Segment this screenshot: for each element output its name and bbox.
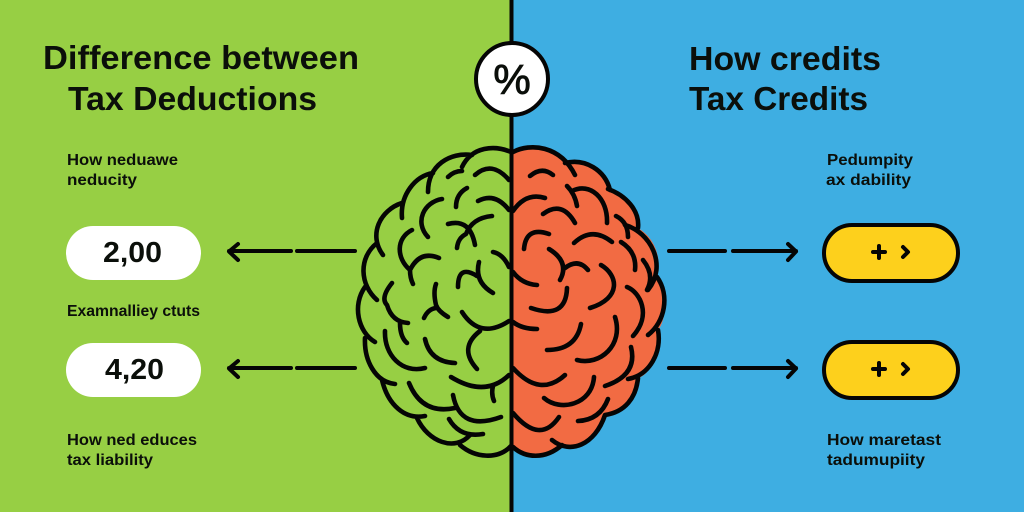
brain right half fill <box>511 147 665 456</box>
text: pedumpity: ax dability <box>826 172 911 189</box>
heading: tax credits <box>689 40 881 117</box>
text: how maretast: tadumupiity <box>827 452 925 469</box>
panel: tax credits background <box>511 0 1024 512</box>
text: how ned educes: How ned educes <box>67 432 197 449</box>
value pill: 4,20: 4,20 <box>105 354 164 386</box>
text: pedumpity: Pedumpity <box>827 152 913 169</box>
yellow pill: lower <box>824 342 958 398</box>
text: pedumpity <box>826 152 913 189</box>
arrow: brain to 4,20 <box>229 361 355 377</box>
icon: percent badge <box>476 43 548 115</box>
value pill: 4,20 <box>66 343 201 397</box>
arrow: brain to 2,00 <box>229 244 355 260</box>
heading: tax deductions <box>43 39 359 117</box>
text: examnalliey ctuts: Examnalliey ctuts <box>67 303 200 320</box>
text: how neduawe: neducity <box>67 172 137 189</box>
heading: tax credits: How credits <box>689 40 881 77</box>
brain left folds <box>384 169 509 435</box>
brain left outline <box>358 148 511 456</box>
text: how neduawe: How neduawe <box>67 152 178 169</box>
text: how maretast: How maretast <box>827 432 941 449</box>
arrow: brain to lower yellow pill <box>669 361 796 377</box>
text: how ned educes: tax liability <box>67 452 153 469</box>
text: how ned educes <box>67 432 197 469</box>
center divider line <box>510 0 514 512</box>
text: how neduawe <box>67 152 178 189</box>
value pill: 2,00 <box>66 226 201 280</box>
value pill: 2,00: 2,00 <box>103 237 162 269</box>
yellow pill: upper <box>824 225 958 281</box>
heading: tax deductions: Difference between <box>43 39 359 76</box>
text: how maretast <box>827 432 941 469</box>
heading: tax deductions: Tax Deductions <box>68 80 317 117</box>
panel: tax deductions background <box>0 0 511 512</box>
arrow: brain to upper yellow pill <box>669 244 796 260</box>
heading: tax credits: Tax Credits <box>689 80 868 117</box>
brain right outline <box>513 147 664 456</box>
brain illustration <box>358 147 664 456</box>
icon: percent badge: % <box>493 56 531 103</box>
brain right folds <box>513 171 650 430</box>
